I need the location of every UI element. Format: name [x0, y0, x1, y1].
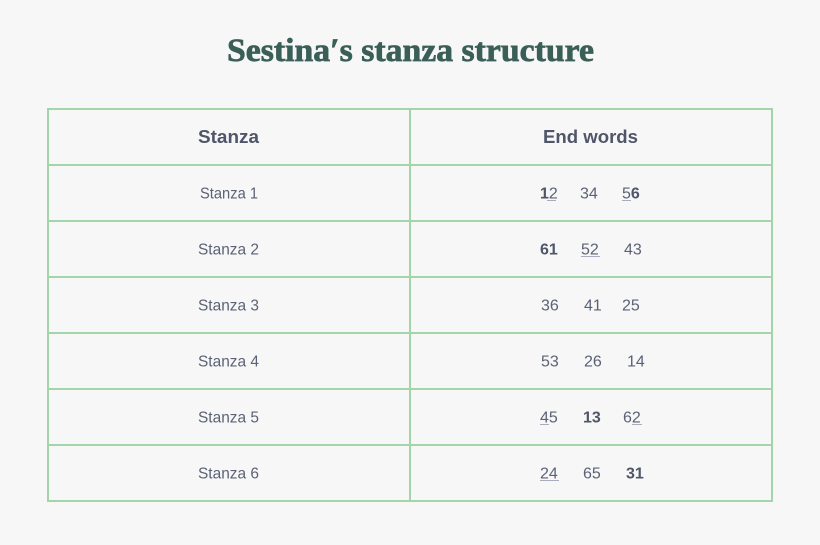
row 1 end words: 12 — [540, 186, 558, 202]
row 2 end words — [540, 242, 642, 258]
row 4 end words: 14 — [627, 354, 645, 370]
row 1 end words: 34 — [580, 186, 598, 202]
title: Sestina′s stanza structure — [227, 33, 594, 69]
header: End words: End words — [543, 126, 638, 147]
row 6 end words: 31 — [626, 466, 644, 482]
row 5 end words: 45 — [540, 410, 558, 426]
row 2 end words: 52 — [581, 242, 599, 258]
row 4 end words — [541, 354, 645, 370]
row 5 end words — [540, 410, 642, 426]
row 6 end words: 24 — [540, 466, 558, 482]
row 3 end words: 36 — [541, 298, 559, 314]
row 4 end words: 53 — [541, 354, 559, 370]
table grid — [48, 109, 772, 501]
row 6 end words — [540, 466, 644, 482]
row 2 end words: 61 — [540, 242, 558, 258]
row 2 label: Stanza 2 — [198, 242, 259, 258]
row 1 end words: 56 — [622, 186, 640, 202]
header: Stanza: Stanza — [198, 126, 260, 147]
row 3 end words: 25 — [622, 298, 640, 314]
row 5 end words: 13 — [583, 410, 601, 426]
row 4 end words: 26 — [584, 354, 602, 370]
row 3 end words: 41 — [584, 298, 602, 314]
table — [48, 109, 772, 501]
row 2 end words: 43 — [624, 242, 642, 258]
row 1 label: Stanza 1 — [200, 186, 258, 202]
row 3 label: Stanza 3 — [198, 298, 259, 314]
row 3 end words — [541, 298, 640, 314]
row 6 label: Stanza 6 — [198, 466, 259, 482]
row 5 label: Stanza 5 — [198, 410, 259, 426]
row 5 end words: 62 — [623, 410, 641, 426]
row 6 end words: 65 — [583, 466, 601, 482]
row 1 end words — [540, 186, 640, 202]
row 4 label: Stanza 4 — [198, 354, 259, 370]
